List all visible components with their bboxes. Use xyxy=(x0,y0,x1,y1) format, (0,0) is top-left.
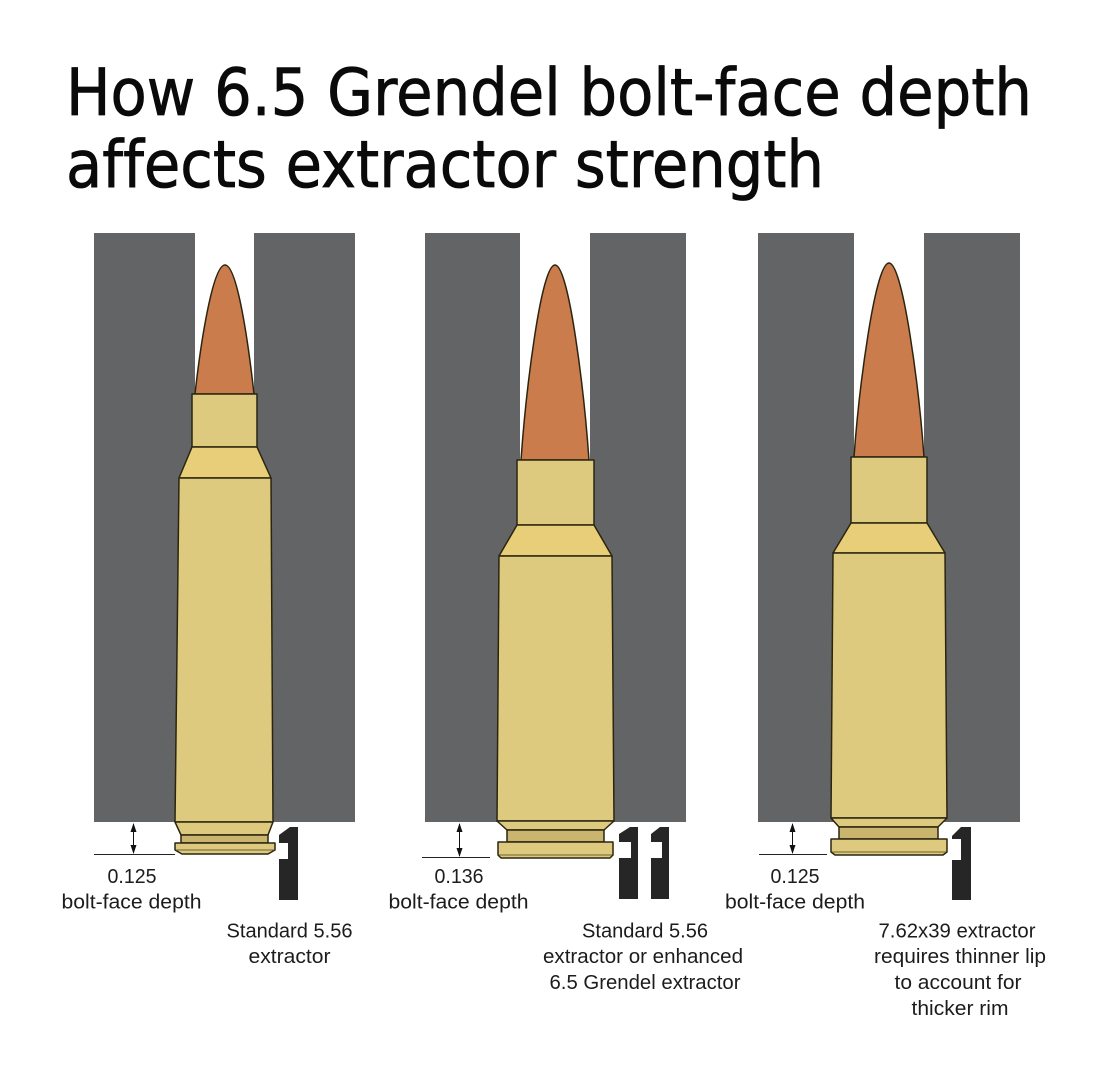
cartridge case xyxy=(831,457,947,855)
depth label: 0.125 xyxy=(108,866,156,888)
extractor label: requires thinner lip xyxy=(874,946,1046,968)
depth label xyxy=(388,866,528,914)
chamber walls xyxy=(425,233,686,822)
title: affects extractor strength xyxy=(66,128,824,203)
depth label: bolt-face depth xyxy=(725,892,865,914)
extractor label: Standard 5.56 xyxy=(582,920,708,942)
cartridge case xyxy=(175,394,275,854)
icon: enhanced extractor xyxy=(651,827,669,899)
chamber walls xyxy=(94,233,355,822)
depth label: bolt-face depth xyxy=(388,892,528,914)
bullet xyxy=(195,265,254,394)
icon: thin-lip extractor xyxy=(952,827,971,900)
depth label: bolt-face depth xyxy=(62,892,202,914)
depth label xyxy=(62,866,202,914)
panel: standard 0.125 bolt face xyxy=(62,233,355,968)
extractor label: extractor xyxy=(248,946,331,968)
extractor label: 6.5 Grendel extractor xyxy=(550,972,741,994)
icon: standard extractor xyxy=(619,827,638,899)
extractor label: 7.62x39 extractor xyxy=(878,920,1036,942)
extractor label xyxy=(226,920,352,968)
bolt-face depth dimension xyxy=(759,823,827,854)
panel: 0.136 bolt face xyxy=(388,233,743,994)
extractor label: Standard 5.56 xyxy=(226,920,352,942)
title xyxy=(66,56,1032,203)
bolt-face depth dimension xyxy=(94,823,175,854)
depth label: 0.136 xyxy=(434,866,484,888)
extractor label xyxy=(874,920,1046,1020)
extractor label: to account for xyxy=(894,972,1022,994)
bullet xyxy=(521,265,589,460)
depth label: 0.125 xyxy=(770,866,820,888)
chamber walls xyxy=(758,233,1020,822)
panel: 7.62x39 extractor xyxy=(725,233,1046,1020)
title: How 6.5 Grendel bolt-face depth xyxy=(66,56,1032,131)
bolt-face depth dimension xyxy=(422,823,490,858)
cartridge case xyxy=(497,460,614,858)
extractor label: thicker rim xyxy=(912,998,1008,1020)
depth label xyxy=(725,866,865,914)
icon: standard extractor xyxy=(279,827,298,900)
extractor label xyxy=(543,920,743,994)
bullet xyxy=(854,263,924,457)
extractor label: extractor or enhanced xyxy=(543,946,743,968)
